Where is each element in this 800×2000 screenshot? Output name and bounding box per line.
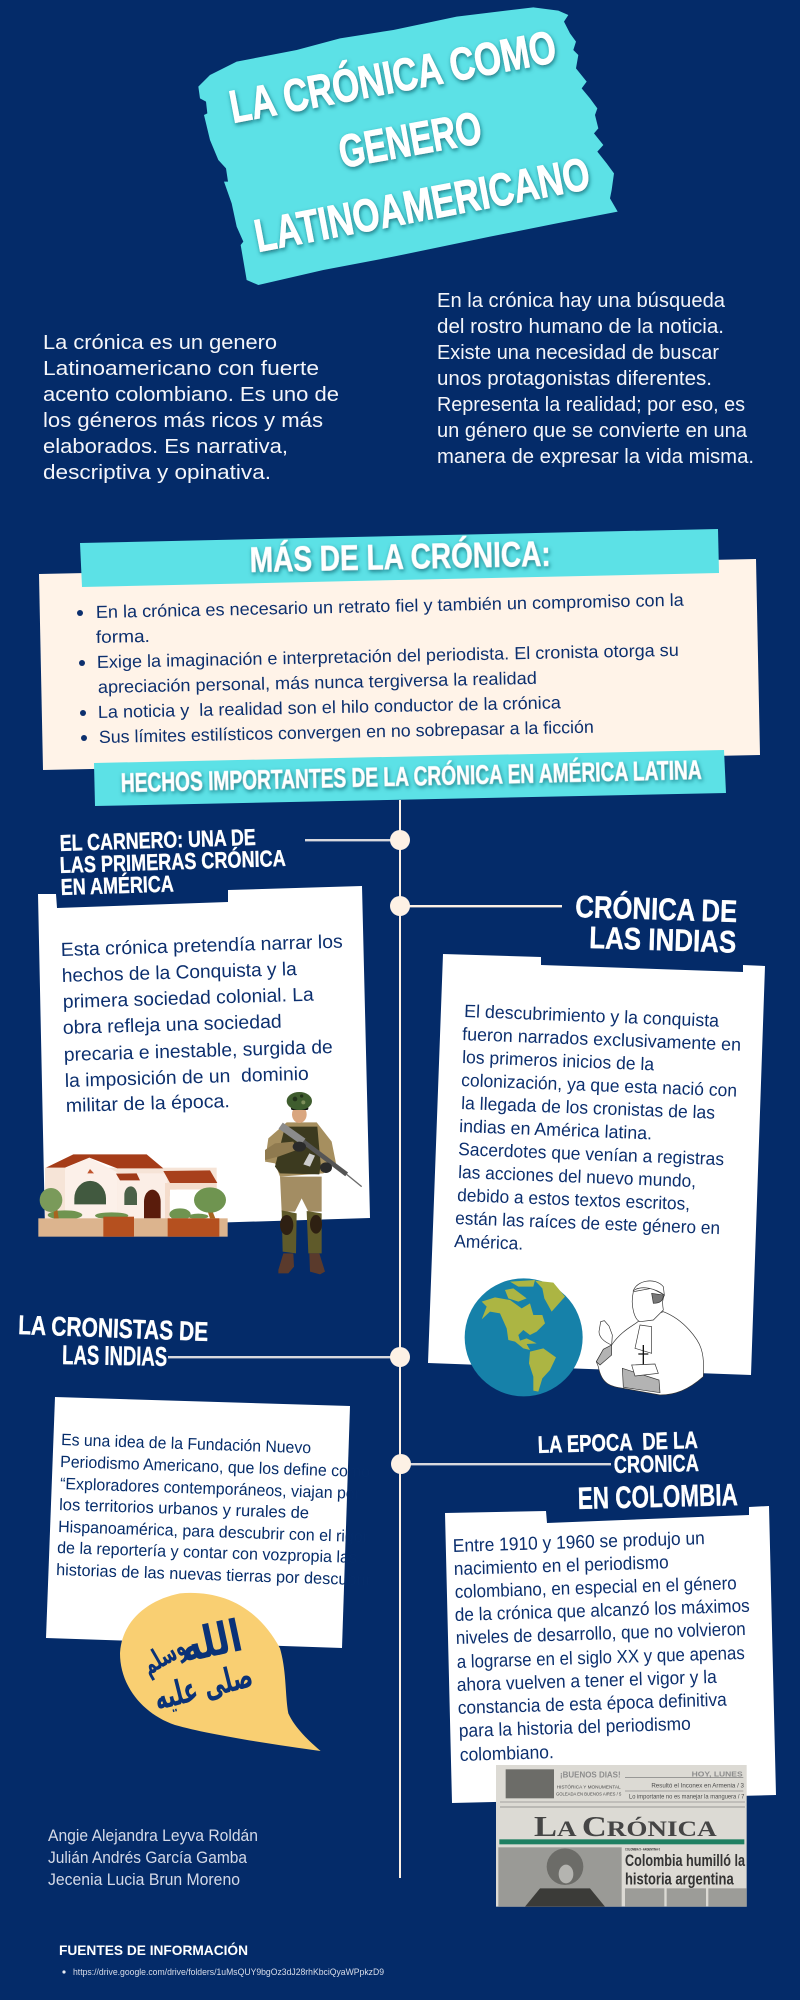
image: newspaper la crónica: HISTÓRICA Y MONUMENTAL: [557, 1784, 621, 1789]
text block: intro right: del rostro humano de la noticia.: [437, 316, 724, 338]
text: la epoca: constancia de esta época definitiva: [457, 1689, 728, 1718]
text: el carnero: primera sociedad colonial. La: [63, 985, 314, 1013]
timeline connectors and dots: [168, 830, 611, 1474]
text block: intro left: acento colombiano. Es uno de: [43, 384, 339, 406]
text: crónica de las indias: debido a estos textos escritos,: [457, 1185, 690, 1214]
text block: intro right: Representa la realidad; por eso, es: [437, 394, 745, 416]
panel: la epoca de la cronica en colombia: [445, 1427, 776, 1803]
icon: speech bubble with calligraphy: [120, 1593, 321, 1751]
text: la epoca: colombiano.: [459, 1741, 554, 1765]
text: la epoca: Entre 1910 y 1960 se produjo un: [452, 1527, 705, 1556]
text: el carnero: obra refleja una sociedad: [63, 1012, 282, 1039]
text: crónica de las indias: las acciones del nuevo mundo,: [458, 1162, 696, 1191]
text block: intro left: La crónica es un genero: [43, 332, 277, 354]
text: la cronistas (overflows in background colour): Periodismo Americano, que los define como: [60, 1453, 370, 1481]
heading: la epoca: EN COLOMBIA: [577, 1477, 738, 1516]
title: [198, 7, 618, 285]
timeline line: [399, 800, 401, 1878]
heading: crónica de las indias: CRÓNICA DE: [575, 888, 738, 929]
text: la cronistas (overflows in background colour): Hispanoamérica, para descubrir con el rigor: [58, 1518, 369, 1546]
text block: authors: Jecenia Lucia Brun Moreno: [48, 1870, 240, 1889]
text: crónica de las indias: están las raíces de este género en: [455, 1208, 720, 1238]
text: la cronistas (overflows in background colour): “Exploradores contemporáneos, viajan por: [60, 1475, 361, 1503]
icon: soldier: [265, 1092, 362, 1274]
text block: intro right: unos protagonistas diferentes.: [437, 368, 712, 390]
text: la epoca: para la historia del periodismo: [458, 1713, 691, 1741]
text: la epoca: ahora vuelven a tener el vigor y la: [456, 1666, 718, 1695]
panel: la cronistas: [46, 1397, 372, 1648]
image: newspaper la crónica: GOLEADA EN BUENOS AIRES / 5: [556, 1792, 622, 1797]
text: la cronistas (overflows in background colour): Es una idea de la Fundación Nuevo: [61, 1431, 311, 1457]
heading: más de la crónica: [80, 529, 719, 587]
heading: la epoca: LA EPOCA DE LA: [537, 1427, 698, 1459]
title: LA CRÓNICA COMO: [225, 20, 560, 133]
text block: intro left: los géneros más ricos y más: [43, 410, 323, 432]
text block: authors: Angie Alejandra Leyva Roldán: [48, 1826, 258, 1845]
text: la epoca: nacimiento en el periodismo: [453, 1551, 669, 1579]
panel: más de la crónica: [39, 559, 760, 770]
bullet list: [77, 590, 684, 747]
text: crónica de las indias: fueron narrados exclusivamente en: [462, 1024, 741, 1055]
bullet list: apreciación personal, más nunca tergiversa la realidad: [98, 668, 537, 697]
image: newspaper la crónica: LA CRÓNICA: [534, 1812, 717, 1843]
text block: sources: [59, 1941, 384, 1978]
text: la cronistas (overflows in background colour): de la reportería y contar con vozpropia las: [57, 1539, 357, 1567]
text: la epoca: a lograrse en el siglo XX y que apenas: [456, 1642, 745, 1672]
text: el carnero: precaria e inestable, surgida de: [64, 1037, 333, 1066]
heading: crónica de las indias: [575, 888, 738, 960]
text block: sources: https://drive.google.com/drive/folders/1uMsQUY9bgOz3dJ28rhKbciQyaWPpkzD9: [73, 1967, 384, 1978]
panel: el carnero: [38, 824, 370, 1274]
text block: intro left: [43, 332, 339, 484]
text: crónica de las indias: los primeros inicios de la: [462, 1047, 655, 1074]
text: la epoca: niveles de desarrollo, que no volvieron: [455, 1618, 746, 1648]
heading: más de la crónica: MÁS DE LA CRÓNICA:: [249, 534, 551, 580]
heading: la cronistas de las indias: LA CRONISTAS DE: [18, 1310, 209, 1347]
title: LATINOAMERICANO: [250, 147, 594, 262]
image: newspaper la crónica: Colombia humilló la: [625, 1851, 746, 1870]
text block: authors: Julián Andrés García Gamba: [48, 1848, 247, 1867]
bullet list: Sus límites estilísticos convergen en no sobrepasar a la ficción: [99, 717, 594, 747]
bullet list: Exige la imaginación e interpretación del periodista. El cronista otorga su: [97, 640, 679, 672]
image: newspaper la crónica: [496, 1765, 747, 1907]
text block: intro left: Latinoamericano con fuerte: [43, 358, 319, 380]
heading: la epoca: [537, 1427, 738, 1516]
icon: pope: [596, 1281, 704, 1395]
title: GENERO: [335, 101, 485, 178]
text: crónica de las indias: [454, 1001, 741, 1254]
icon: globe: [465, 1278, 583, 1396]
bullet list: La noticia y la realidad son el hilo conductor de la crónica: [98, 692, 561, 722]
text block: intro left: elaborados. Es narrativa,: [43, 436, 288, 458]
text block: intro right: Existe una necesidad de buscar: [437, 342, 719, 364]
heading: el carnero: LAS PRIMERAS CRÓNICA: [59, 844, 286, 878]
text: crónica de las indias: la llegada de los cronistas de las: [461, 1093, 715, 1123]
image: newspaper la crónica: ¡BUENOS DIAS!: [560, 1770, 621, 1779]
text: crónica de las indias: indias en América latina.: [459, 1116, 652, 1143]
icon: speech bubble with calligraphy: الله: [175, 1610, 247, 1673]
text: el carnero: [61, 932, 343, 1117]
text: el carnero: la imposición de un dominio: [65, 1064, 309, 1092]
icon: speech bubble with calligraphy: صلى عليه: [150, 1656, 257, 1719]
text block: sources: FUENTES DE INFORMACIÓN: [59, 1941, 248, 1958]
image: newspaper la crónica: Resultó el Inconex en Armenia / 3: [651, 1783, 745, 1789]
text: crónica de las indias: Sacerdotes que venían a registras: [458, 1139, 724, 1169]
text: la epoca: colombiano, en especial en el género: [454, 1572, 737, 1602]
text block: intro right: En la crónica hay una búsqueda: [437, 290, 726, 312]
text: crónica de las indias: colonización, ya que esta nació con: [461, 1070, 737, 1101]
bullet list: forma.: [96, 626, 150, 647]
heading: la cronistas de las indias: [18, 1310, 209, 1372]
text: la epoca: de la crónica que alcanzó los máximos: [454, 1595, 750, 1625]
text block: intro right: un género que se convierte en una: [437, 420, 748, 442]
image: newspaper la crónica: Lo importante no es manejar la manguera / 7: [629, 1795, 745, 1801]
text: la epoca: [452, 1527, 750, 1765]
icon: house: [38, 1154, 228, 1237]
heading: el carnero: [59, 824, 286, 900]
text: el carnero: hechos de la Conquista y la: [62, 959, 297, 987]
text: la cronistas (overflows in background colour): los territorios urbanos y rurales de: [59, 1496, 309, 1522]
panel: crónica de las indias: [428, 888, 765, 1396]
text block: intro left: descriptiva y opinativa.: [43, 462, 271, 484]
text: el carnero: Esta crónica pretendía narrar los: [61, 932, 343, 961]
heading: el carnero: EL CARNERO: UNA DE: [59, 824, 256, 856]
heading: crónica de las indias: LAS INDIAS: [589, 920, 737, 960]
text: la cronistas (overflows in background colour): [56, 1431, 372, 1589]
text: el carnero: militar de la época.: [66, 1091, 230, 1117]
text: la cronistas (overflows in background colour): historias de las nuevas tierras por descubrir: [56, 1561, 372, 1589]
text: crónica de las indias: El descubrimiento y la conquista: [464, 1001, 720, 1031]
text block: authors: [48, 1826, 258, 1889]
text: crónica de las indias: América.: [454, 1231, 524, 1254]
icon: speech bubble with calligraphy: وسلم: [135, 1630, 191, 1682]
image: newspaper la crónica: HOY, LUNES: [692, 1770, 743, 1779]
heading: la epoca: CRONICA: [613, 1450, 699, 1479]
image: newspaper la crónica: historia argentina: [625, 1870, 734, 1889]
heading: el carnero: EN AMÉRICA: [60, 869, 174, 900]
image: newspaper la crónica: COLOMBIA 5 - ARGENTINA 0: [625, 1848, 660, 1852]
heading: la cronistas de las indias: LAS INDIAS: [62, 1340, 167, 1372]
text block: intro right: [437, 290, 754, 468]
text block: intro right: manera de expresar la vida misma.: [437, 446, 754, 468]
bullet list: En la crónica es necesario un retrato fiel y también un compromiso con la: [96, 590, 684, 622]
